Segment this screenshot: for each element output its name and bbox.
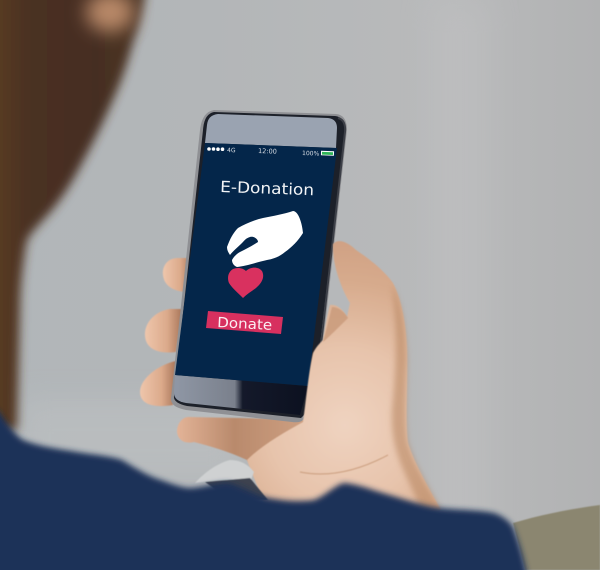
heading: E-Donation: E-Donation [220,178,314,199]
button: Donate: Donate [217,315,273,334]
top bezel [205,114,337,148]
blurred person: head and neck [0,0,148,430]
bezel reflection [317,118,345,380]
thumb, palm and wrist [247,241,441,522]
button: Donate [206,311,283,334]
watch strap glimpse [195,460,268,500]
screen [175,143,337,386]
bottom bezel [174,375,308,415]
phone body [171,110,347,422]
fingers behind phone [140,258,320,486]
battery percent: 100% [302,150,320,158]
shirt: navy shoulder [0,395,530,570]
web shading [323,307,348,342]
status bar [207,147,334,158]
finger: index tip [163,258,192,292]
phone [171,110,347,422]
battery icon [321,151,334,156]
right side shading on hand [392,285,441,510]
finger: ring tip [140,361,176,406]
signal dots [207,147,224,151]
icon: heart [228,268,263,298]
wrist crease [300,455,388,474]
clock: 12:00 [258,147,277,156]
finger: little finger below phone [177,417,320,486]
icon: white hand [227,211,303,267]
network label: 4G [227,147,236,154]
jacket sleeve: olive at right [513,505,600,570]
finger: middle tip [145,309,182,352]
